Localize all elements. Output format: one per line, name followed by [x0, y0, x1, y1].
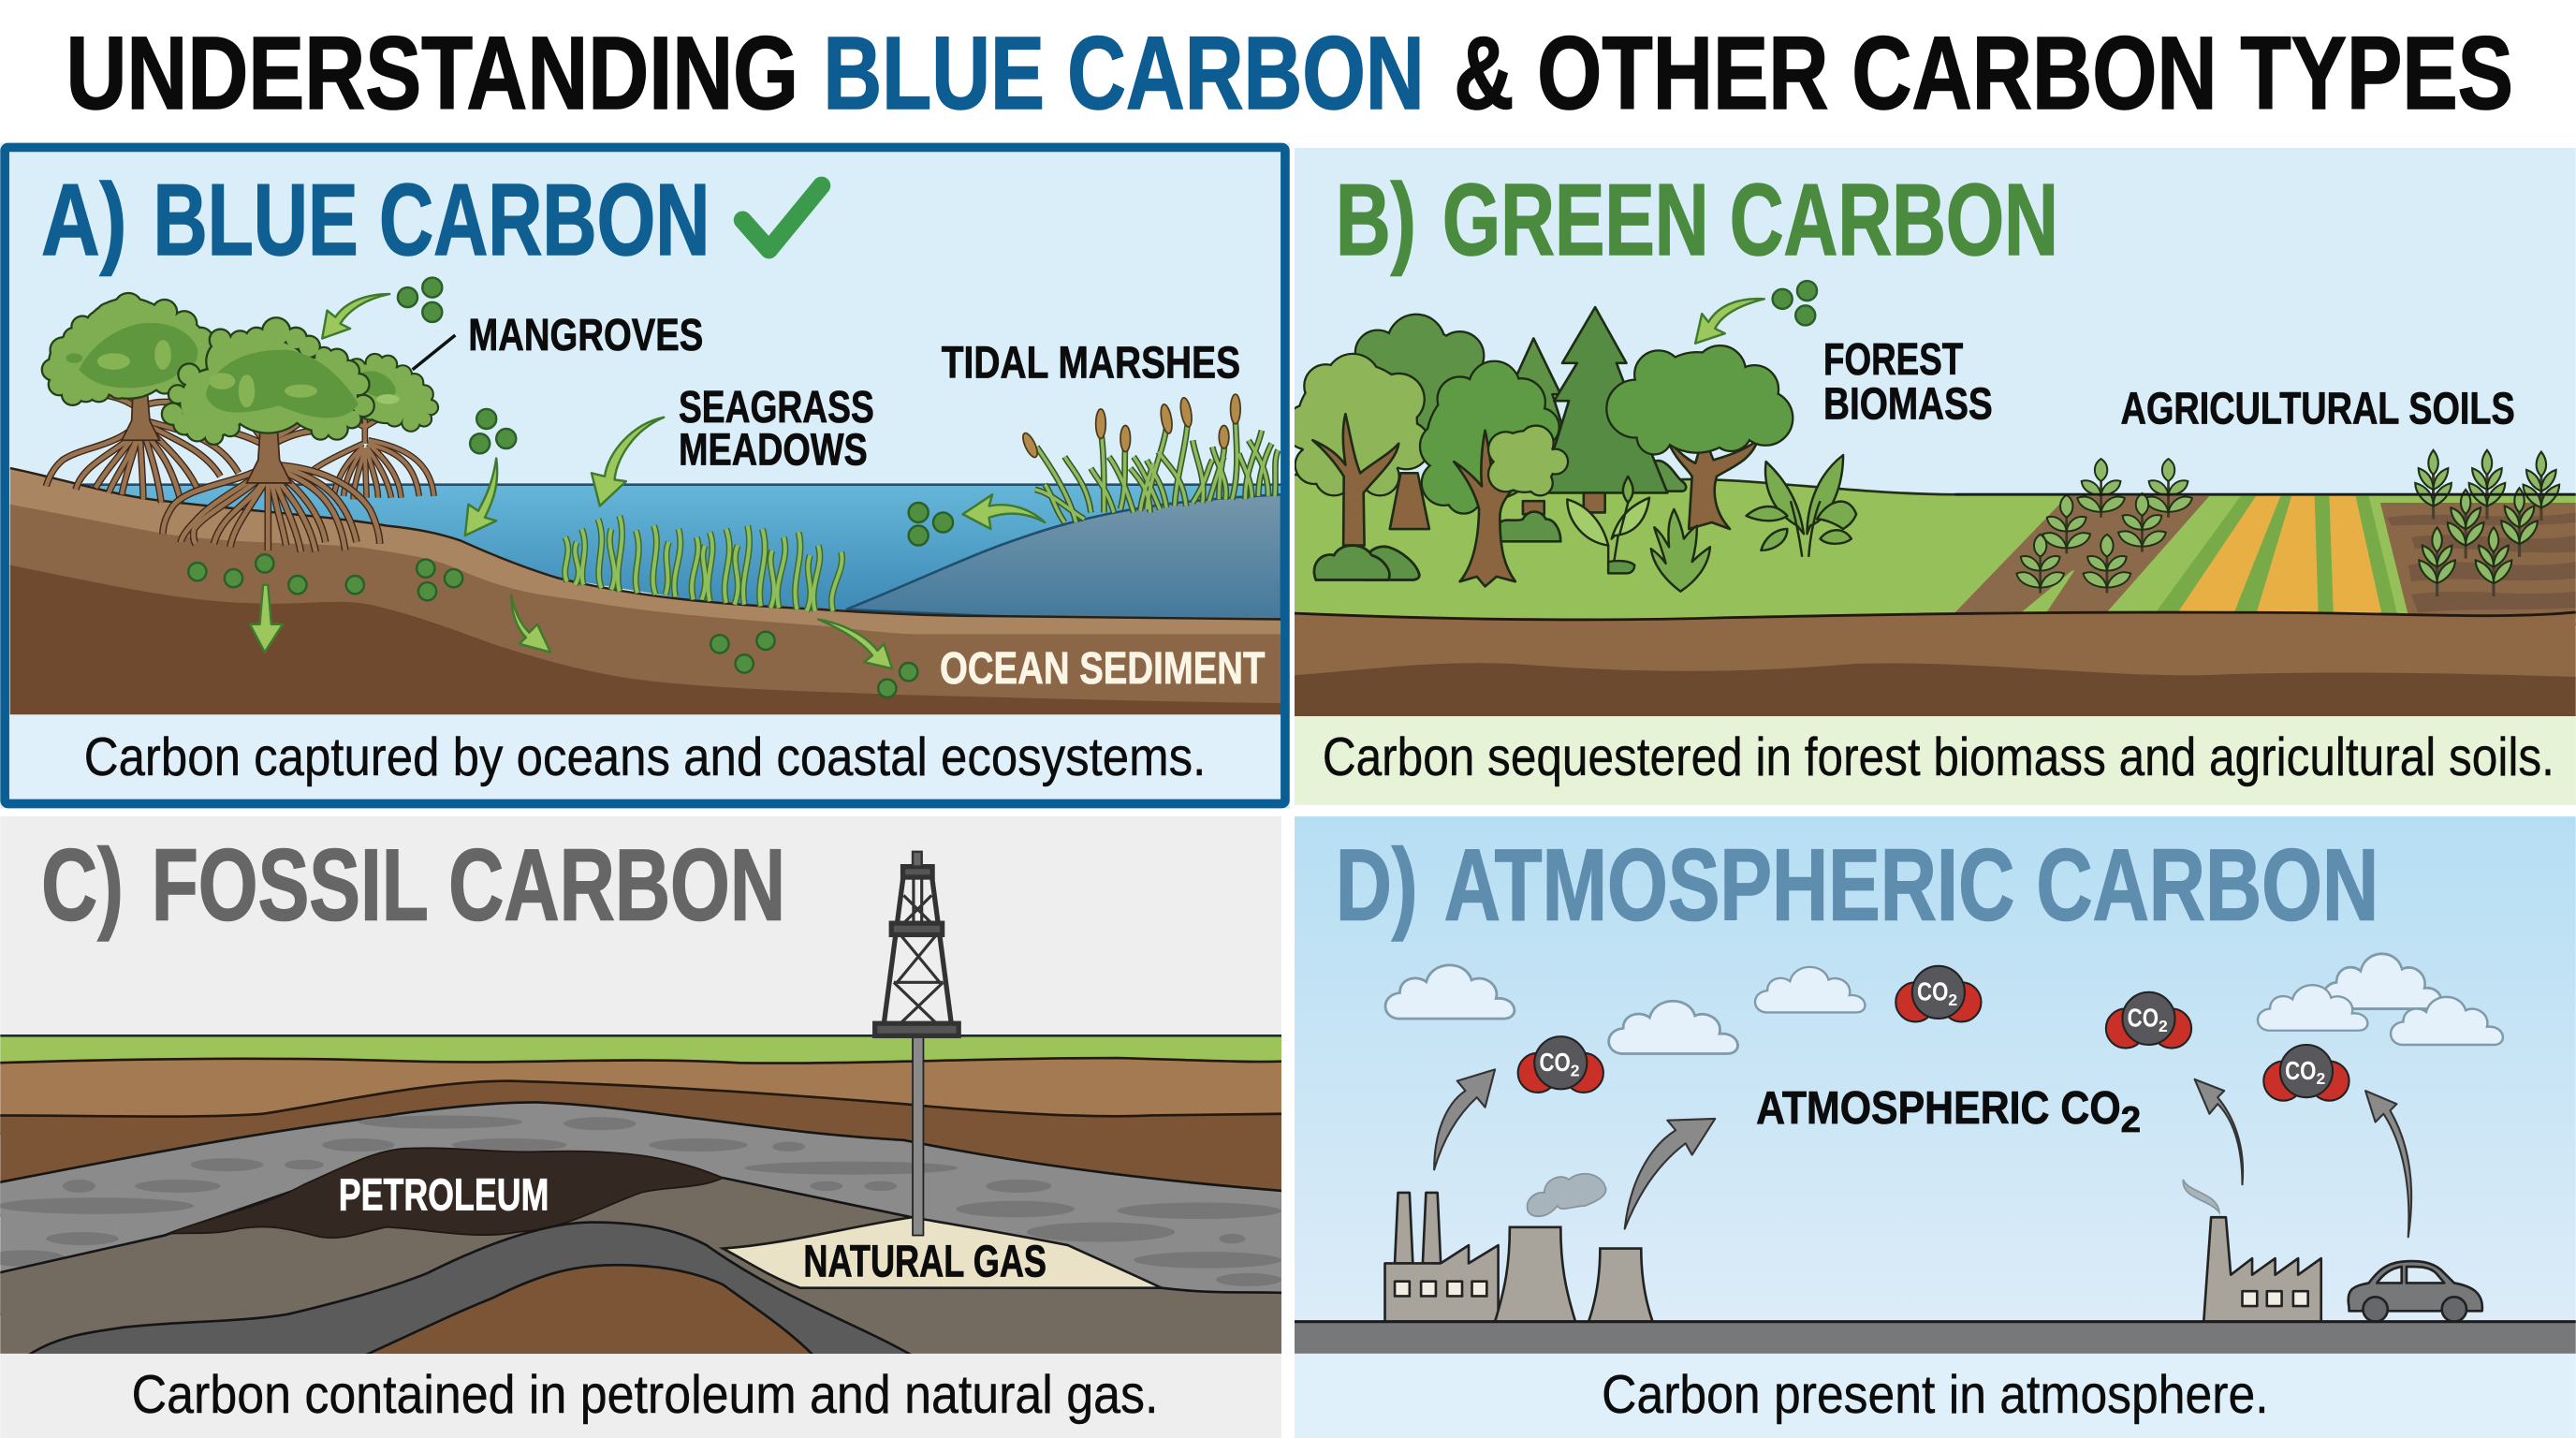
seagrass: [565, 516, 842, 611]
heading A: BLUE CARBON: [153, 164, 710, 277]
heading B: GREEN CARBON: [1442, 164, 2058, 277]
water: [82, 485, 1281, 621]
panel: B green carbon: [1281, 148, 2576, 805]
mangroves leader line: [413, 335, 455, 370]
heading C: [41, 829, 785, 943]
arrow B: [1695, 299, 1764, 344]
heading C: FOSSIL CARBON: [152, 829, 785, 943]
forest: [1286, 307, 1792, 586]
grass layer: [0, 1035, 1284, 1065]
CO2 molecule 4: 2: [2316, 1069, 2325, 1088]
CO2 molecule 4: [2263, 1045, 2349, 1101]
CO2 molecule 1: [1518, 1036, 1603, 1093]
heading B: B): [1336, 164, 1416, 277]
lower rock: [0, 1176, 1281, 1354]
CO2 molecule 3: 2: [2159, 1017, 2168, 1035]
strata: [0, 1035, 1284, 1356]
fossil labels: [339, 1169, 1046, 1286]
title: [66, 16, 2513, 131]
caption band D: [1295, 1354, 2576, 1438]
clouds: [1385, 954, 2503, 1053]
wisp: [2183, 1180, 2219, 1212]
rock streaks: [0, 1115, 1281, 1286]
CO2 molecule 4: CO: [2285, 1056, 2316, 1085]
panel: C fossil carbon: [0, 816, 1284, 1438]
CO2 molecule 2: [1895, 966, 1981, 1021]
labels: SEAGRASS: [679, 382, 874, 433]
scene B: [1281, 281, 2576, 723]
oil derrick: [875, 852, 959, 1035]
panel: D atmospheric carbon: [1295, 816, 2576, 1438]
field: [1954, 448, 2576, 618]
heading C: C): [41, 829, 124, 943]
CO2 molecule 2: CO: [1917, 977, 1948, 1006]
labels: TIDAL MARSHES: [942, 338, 1240, 389]
caption band: [10, 714, 1280, 800]
title: BLUE CARBON: [823, 16, 1425, 131]
cooling tower 2: [1588, 1249, 1653, 1322]
labels: MANGROVES: [468, 310, 703, 360]
check mark: [742, 185, 822, 250]
labels B: FOREST: [1823, 334, 1963, 385]
heading A: [41, 164, 710, 277]
heading B: [1336, 164, 2058, 277]
CO2 molecule 1: CO: [1539, 1048, 1571, 1077]
ground line: [1295, 1321, 2576, 1323]
bushes: [1314, 546, 1419, 580]
labels: MEADOWS: [679, 425, 868, 476]
labels B: BIOMASS: [1823, 378, 1993, 429]
caption D: Carbon present in atmosphere.: [1602, 1365, 2269, 1425]
soil: [1281, 611, 2576, 723]
middle soil: [0, 1081, 1284, 1215]
sediment layers: [10, 468, 1281, 714]
title: UNDERSTANDING: [66, 16, 798, 131]
grey arrows: [1434, 1069, 2411, 1237]
marsh mound: [846, 494, 1281, 620]
deep soil: [1295, 663, 2576, 716]
petroleum deposit: [168, 1148, 723, 1238]
green arrows: [250, 294, 1045, 668]
atmospheric label: 2: [2121, 1100, 2141, 1140]
labels: [468, 310, 1265, 694]
CO2 molecule 3: [2106, 992, 2191, 1049]
marsh grasses: [1020, 394, 1278, 522]
labels B: [1825, 343, 2514, 425]
heading A: A): [41, 164, 126, 277]
left factory: [1385, 1193, 1499, 1322]
natural gas pocket: [723, 1217, 1162, 1288]
CO2 molecule 1: 2: [1571, 1061, 1580, 1079]
cooling tower 1: [1495, 1227, 1575, 1322]
CO2 molecule 3: CO: [2128, 1004, 2159, 1033]
plants: [1567, 455, 1856, 592]
right factory: [2203, 1217, 2321, 1322]
well pipe: [913, 1034, 923, 1236]
upper soil: [0, 1058, 1284, 1134]
CO2 molecule 2: 2: [1948, 990, 1957, 1009]
mangrove trees: [43, 294, 437, 552]
heading D: D): [1336, 829, 1418, 943]
atmospheric label: ATMOSPHERIC CO: [1756, 1083, 2121, 1134]
caption A: Carbon captured by oceans and coastal ecosystems.: [84, 727, 1206, 787]
labels: OCEAN SEDIMENT: [940, 643, 1265, 694]
caption band B: [1295, 716, 2576, 805]
fossil labels: PETROLEUM: [339, 1169, 549, 1220]
caption C: Carbon contained in petroleum and natural gas.: [132, 1365, 1158, 1425]
fossil labels: NATURAL GAS: [803, 1236, 1046, 1286]
carbon dots B: [1773, 281, 1817, 325]
land: [1281, 473, 2576, 624]
smoke: [1528, 1174, 1606, 1216]
grey rock: [0, 1102, 1284, 1314]
ground line: [0, 1034, 1284, 1036]
carbon dots: [188, 278, 953, 697]
frame: [5, 147, 1285, 804]
car: [2349, 1261, 2482, 1322]
grey anticline: [28, 1223, 912, 1356]
panel: A blue carbon: [0, 143, 1290, 808]
core brown: [365, 1265, 813, 1356]
ground: [1295, 1321, 2576, 1354]
